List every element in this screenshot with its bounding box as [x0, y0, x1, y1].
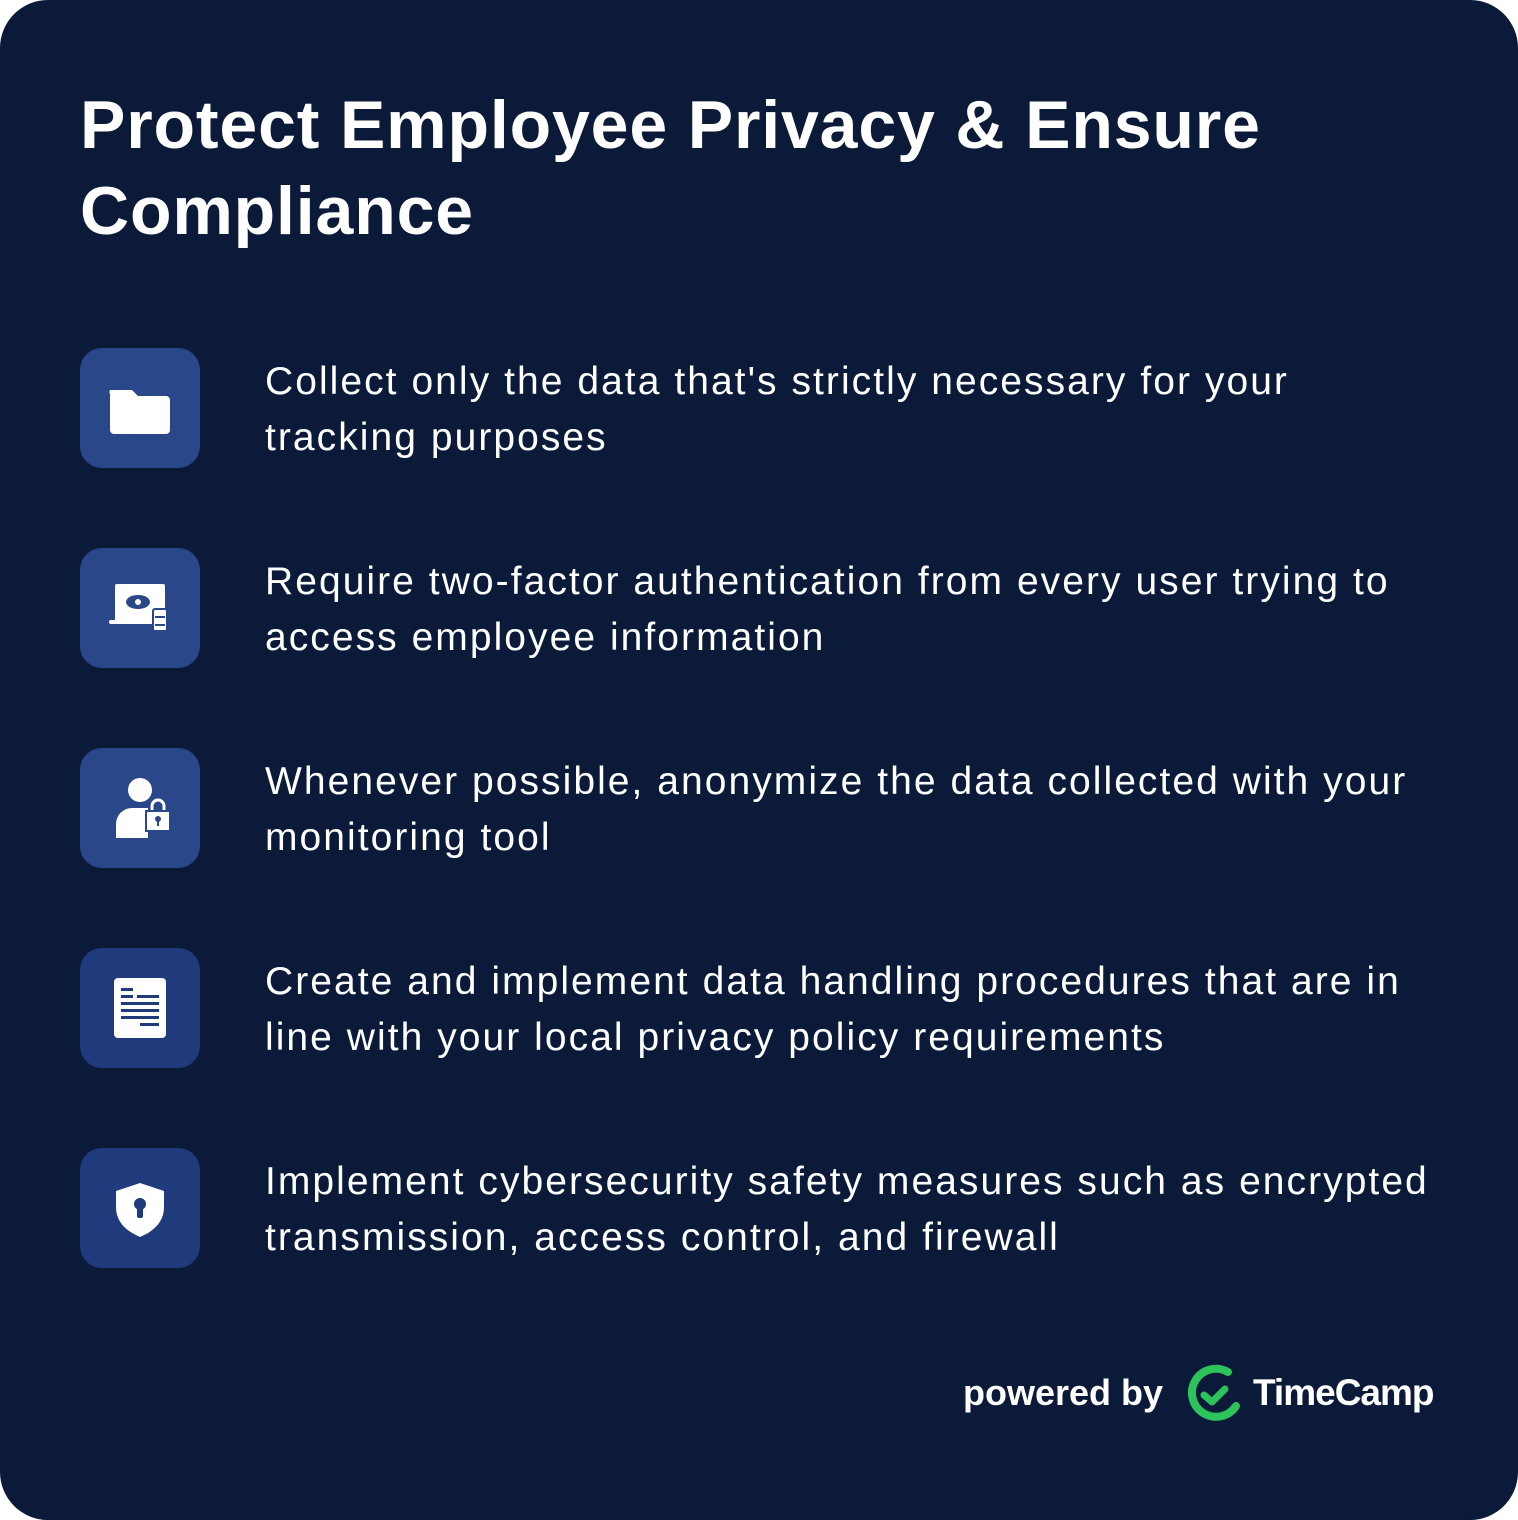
icon: folder — [80, 348, 200, 468]
text: access employee information — [265, 616, 825, 659]
item 3 — [80, 748, 1407, 868]
text — [265, 1160, 1429, 1259]
item 1 — [80, 348, 1289, 468]
text: TimeCamp: TimeCamp — [1253, 1372, 1434, 1413]
text — [265, 760, 1407, 859]
text: Implement cybersecurity safety measures such as encrypted — [265, 1160, 1429, 1203]
text — [265, 560, 1390, 659]
text: powered by: powered by — [963, 1372, 1163, 1413]
icon: document — [80, 948, 200, 1068]
text — [265, 960, 1401, 1059]
text: Collect only the data that's strictly necessary for your — [265, 360, 1289, 403]
icon: user lock — [80, 748, 200, 868]
text: monitoring tool — [265, 816, 552, 859]
text: Whenever possible, anonymize the data collected with your — [265, 760, 1407, 803]
title: Protect Employee Privacy & Ensure — [80, 87, 1261, 163]
logo icon — [1188, 1364, 1240, 1421]
icon: shield — [80, 1148, 200, 1268]
icon: laptop eye — [80, 548, 200, 668]
text — [265, 360, 1289, 459]
text: Require two-factor authentication from every user trying to — [265, 560, 1390, 603]
text: line with your local privacy policy requirements — [265, 1016, 1165, 1059]
item 4 — [80, 948, 1401, 1068]
text: transmission, access control, and firewall — [265, 1216, 1060, 1259]
text: tracking purposes — [265, 416, 608, 459]
text: Create and implement data handling procedures that are in — [265, 960, 1401, 1003]
title: Compliance — [80, 173, 474, 249]
brand: powered by TimeCamp — [963, 1364, 1434, 1421]
item 5 — [80, 1148, 1429, 1268]
item 2 — [80, 548, 1390, 668]
title — [80, 87, 1261, 249]
